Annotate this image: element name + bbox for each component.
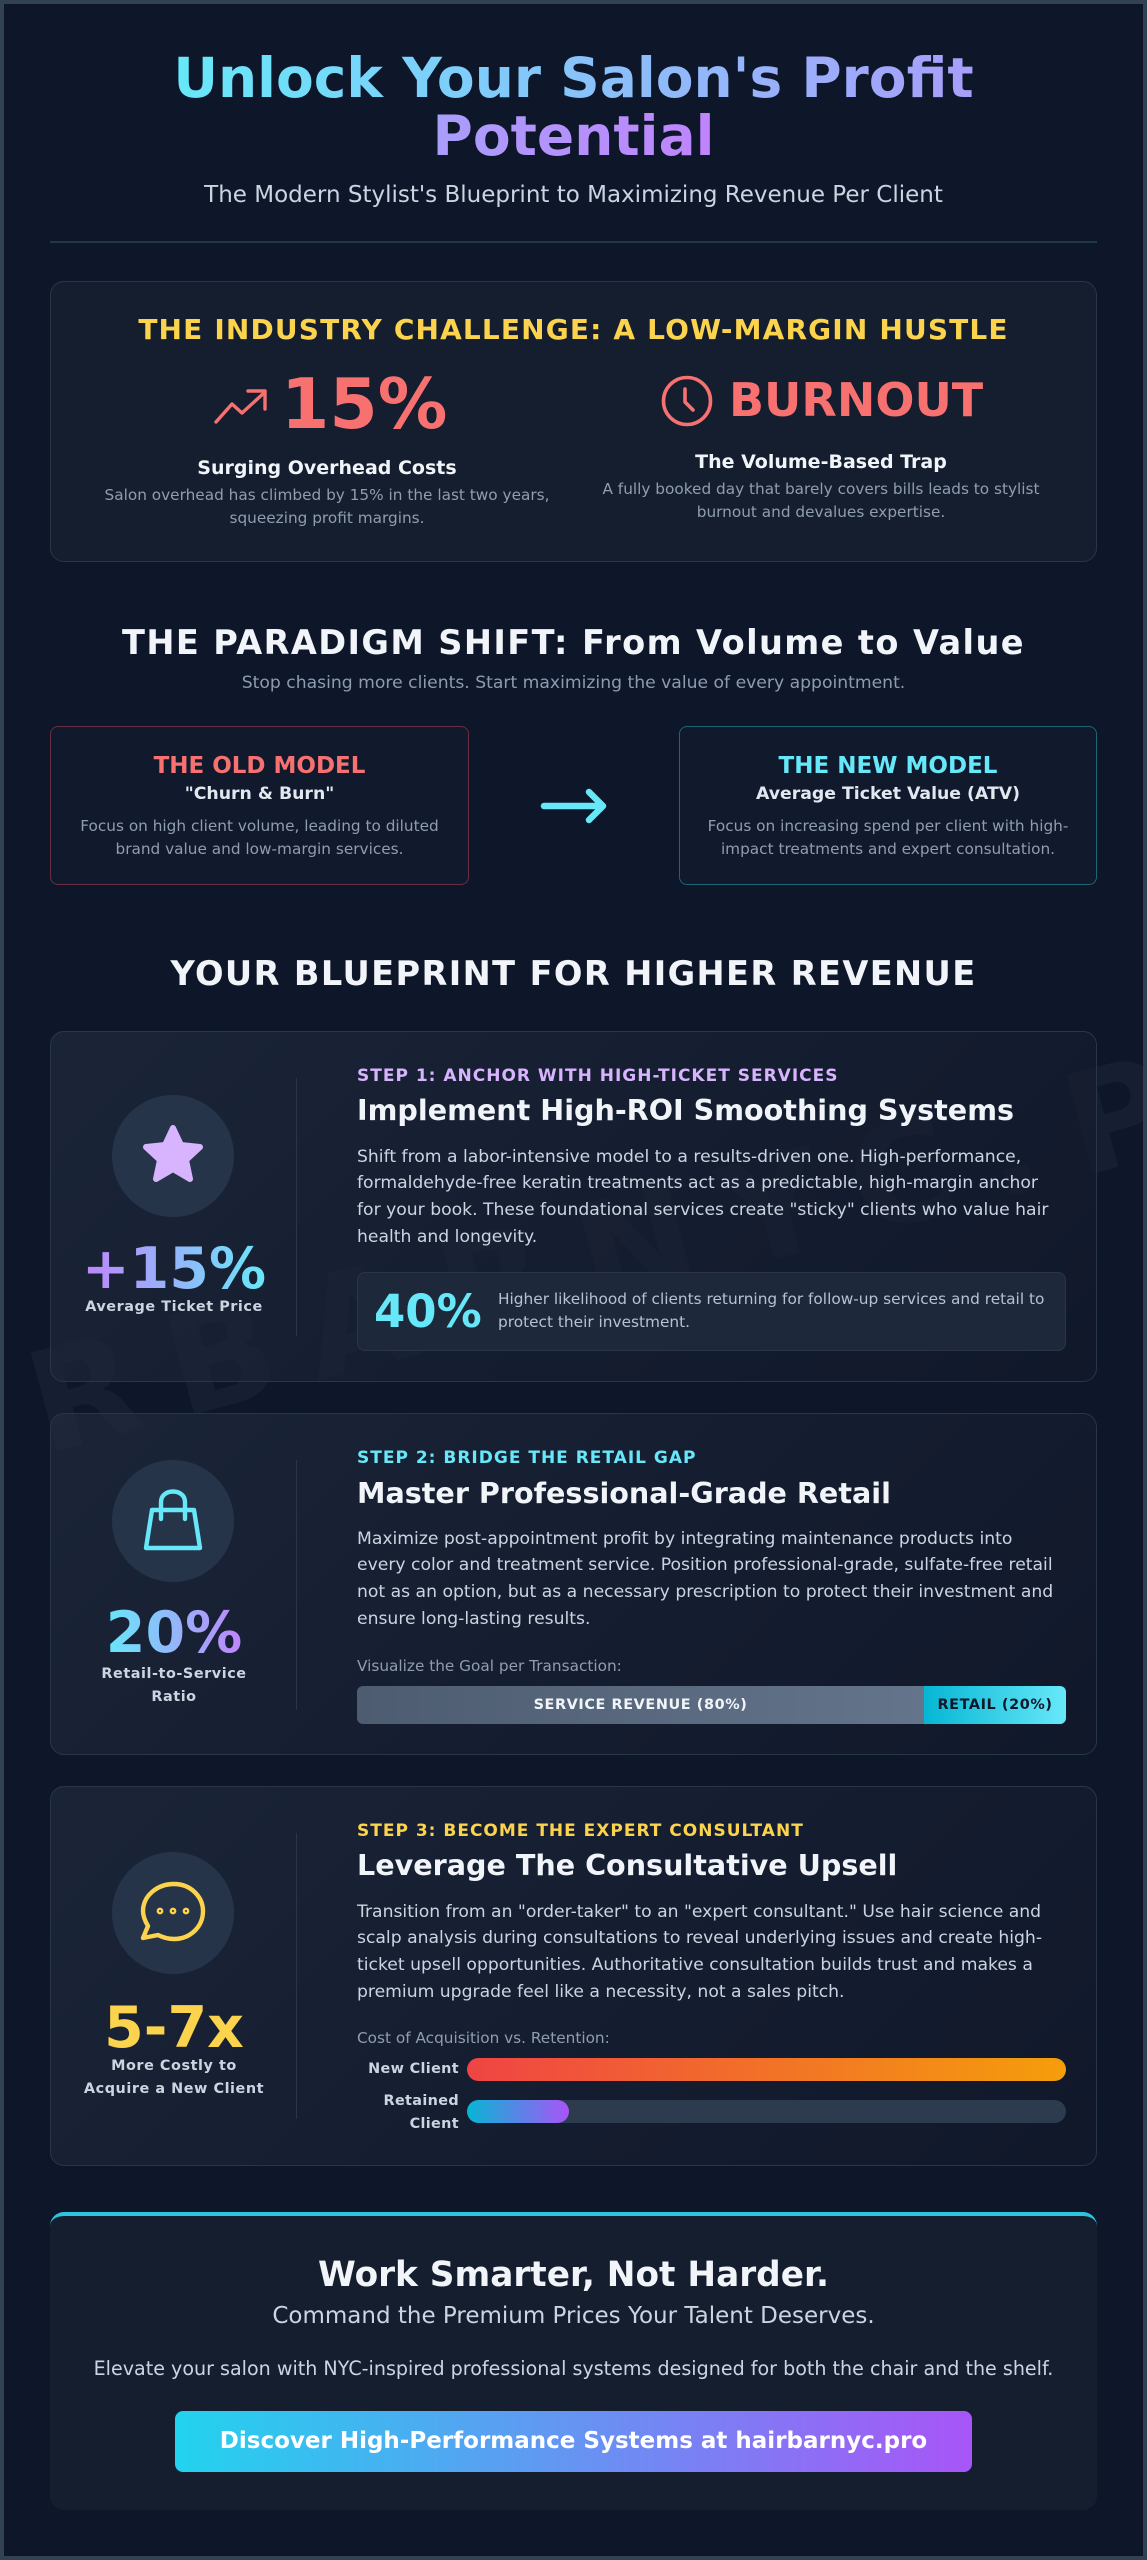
card: volume-based trap <box>602 450 1040 520</box>
step text: ticket upsell opportunities. Authoritative consultation builds trust and makes a <box>357 1955 1033 1975</box>
title: Potential <box>433 104 714 168</box>
challenge heading: THE INDUSTRY CHALLENGE: A LOW-MARGIN HUSTLE <box>138 313 1009 346</box>
cta subtitle: Command the Premium Prices Your Talent Deserves. <box>272 2303 875 2329</box>
step text <box>357 1528 1053 1629</box>
step text: ensure long-lasting results. <box>357 1609 590 1629</box>
old model text <box>80 817 439 858</box>
callout: 40% <box>357 1272 1066 1351</box>
icon: trending up <box>214 389 267 424</box>
card text: burnout and devalues expertise. <box>697 502 945 520</box>
card text: Salon overhead has climbed by 15% in the last two years, <box>105 486 549 504</box>
icon: chat bubble <box>112 1852 234 1974</box>
retail segment <box>924 1686 1066 1724</box>
arrow <box>540 788 606 824</box>
service revenue segment <box>357 1686 924 1724</box>
vertical divider <box>296 1833 297 2119</box>
title: Unlock Your Salon's Profit <box>173 46 974 110</box>
bar label: retained client <box>384 2092 459 2132</box>
step text <box>357 1146 1048 1247</box>
step text: Shift from a labor-intensive model to a results-driven one. High-performance, <box>357 1146 1021 1166</box>
cta title: Work Smarter, Not Harder. <box>318 2255 829 2295</box>
stat: burnout: BURNOUT <box>729 373 983 427</box>
panel: new model <box>679 726 1097 885</box>
step text: scalp analysis during consultations to reveal underlying issues and create high- <box>357 1928 1042 1948</box>
step text: Maximize post-appointment profit by integrating maintenance products into <box>357 1528 1012 1548</box>
card title: The Volume-Based Trap <box>695 450 947 472</box>
stat: 5-7x: 5-7x <box>104 1995 244 2061</box>
old model subtitle: "Churn & Burn" <box>185 784 334 804</box>
bar label: retained client: Retained <box>384 2092 459 2108</box>
new model title: THE NEW MODEL <box>779 753 997 779</box>
stat label: Retail-to-Service <box>101 1666 247 1682</box>
old model text: brand value and low-margin services. <box>115 840 404 858</box>
cta text: Elevate your salon with NYC-inspired professional systems designed for both the chair and the shelf. <box>94 2357 1053 2380</box>
step text: for your book. These foundational services create "sticky" clients who value hair <box>357 1200 1048 1220</box>
panel: industry challenge <box>50 281 1097 562</box>
stat label: Acquire a New Client <box>84 2081 264 2097</box>
old model title: THE OLD MODEL <box>154 753 365 779</box>
panel: old model <box>50 726 469 885</box>
stat label: Average Ticket Price <box>85 1299 263 1315</box>
step text: formaldehyde-free keratin treatments act as a predictable, high-margin anchor <box>357 1173 1038 1193</box>
icon: clock <box>662 376 712 426</box>
step text: not as an option, but as a necessary prescription to protect their investment and <box>357 1582 1053 1602</box>
panel: step 1 <box>50 1031 1097 1382</box>
bar label: new client: New Client <box>368 2061 459 2077</box>
new model text: Focus on increasing spend per client with high- <box>708 817 1068 835</box>
step title: Leverage The Consultative Upsell <box>357 1848 897 1882</box>
header divider <box>50 241 1097 243</box>
stat: 15%: 15% <box>281 364 447 445</box>
card: surging overhead costs <box>105 457 549 527</box>
step text: health and longevity. <box>357 1227 537 1247</box>
callout text <box>498 1290 1044 1331</box>
new model subtitle: Average Ticket Value (ATV) <box>756 784 1020 804</box>
service revenue segment: SERVICE REVENUE (80%) <box>534 1697 747 1713</box>
stacked bar chart <box>357 1686 1066 1724</box>
step text: every color and treatment service. Position professional-grade, sulfate-free retail <box>357 1555 1053 1575</box>
panel: step 3 <box>50 1786 1097 2166</box>
chart label: Visualize the Goal per Transaction: <box>357 1657 622 1675</box>
step label: STEP 2: BRIDGE THE RETAIL GAP <box>357 1448 696 1468</box>
icon: star <box>112 1094 234 1216</box>
step title: Implement High-ROI Smoothing Systems <box>357 1093 1014 1127</box>
old model text: Focus on high client volume, leading to diluted <box>80 817 439 835</box>
new model text: impact treatments and expert consultation. <box>721 840 1055 858</box>
panel: step 2 <box>50 1413 1097 1755</box>
stat label <box>101 1666 247 1705</box>
card text <box>105 486 549 527</box>
chart label: Cost of Acquisition vs. Retention: <box>357 2028 610 2046</box>
bar label: retained client: Client <box>410 2116 459 2132</box>
retail segment: RETAIL (20%) <box>937 1697 1053 1713</box>
step label: STEP 3: BECOME THE EXPERT CONSULTANT <box>357 1821 804 1841</box>
step text: premium upgrade feel like a necessity, not a sales pitch. <box>357 1982 845 2002</box>
bar fill <box>467 2100 569 2123</box>
cta button: Discover High-Performance Systems at hairbarnyc.pro <box>220 2428 927 2454</box>
icon: shopping bag <box>112 1460 234 1582</box>
card title: Surging Overhead Costs <box>197 457 457 479</box>
new model text <box>708 817 1068 858</box>
blueprint heading: YOUR BLUEPRINT FOR HIGHER REVENUE <box>170 954 977 993</box>
stat label <box>84 2058 264 2097</box>
title <box>173 46 974 168</box>
card text: A fully booked day that barely covers bills leads to stylist <box>602 480 1040 498</box>
step text: Transition from an "order-taker" to an "expert consultant." Use hair science and <box>357 1902 1041 1922</box>
paradigm subheading: Stop chasing more clients. Start maximizing the value of every appointment. <box>242 673 905 693</box>
stat label: More Costly to <box>111 2058 237 2074</box>
callout number: 40% <box>374 1285 482 1338</box>
vertical divider <box>296 1078 297 1336</box>
subtitle: The Modern Stylist's Blueprint to Maximizing Revenue Per Client <box>204 182 943 208</box>
card text <box>602 480 1040 520</box>
step text <box>356 1902 1042 2002</box>
cta button <box>175 2411 972 2472</box>
step title: Master Professional-Grade Retail <box>357 1476 891 1510</box>
step label: STEP 1: ANCHOR WITH HIGH-TICKET SERVICES <box>357 1066 838 1086</box>
stat: 20%: 20% <box>106 1600 242 1666</box>
callout text: Higher likelihood of clients returning for follow-up services and retail to <box>498 1290 1044 1308</box>
stat: +15%: +15% <box>82 1236 266 1302</box>
vertical divider <box>296 1460 297 1710</box>
callout text: protect their investment. <box>498 1313 690 1331</box>
panel: call to action <box>50 2212 1097 2510</box>
stat label: Ratio <box>151 1689 197 1705</box>
paradigm shift heading: THE PARADIGM SHIFT: From Volume to Value <box>122 623 1025 662</box>
bar: retained client <box>467 2100 1066 2123</box>
card text: squeezing profit margins. <box>229 509 425 527</box>
bar: new client <box>467 2058 1066 2081</box>
